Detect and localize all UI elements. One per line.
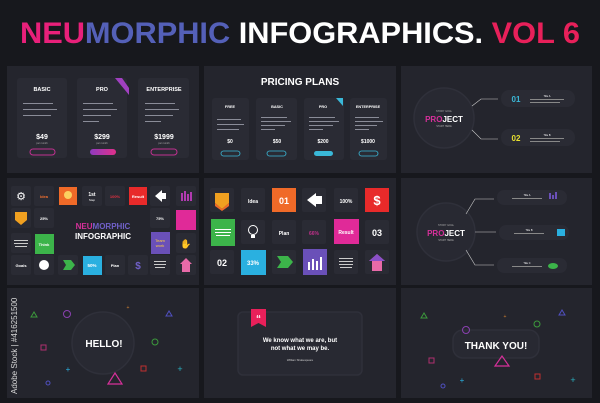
- pill A: [497, 190, 567, 205]
- pill B: [499, 225, 569, 240]
- panel: project two titles: START HERE: [436, 125, 452, 128]
- panel: neumorphic infographic icons: 100%: [110, 194, 121, 199]
- panel: hello: HELLO!: [85, 339, 123, 350]
- panel: project three titles: PROJECT: [427, 229, 465, 238]
- panel: large icon grid: 01: [279, 196, 289, 206]
- pill C: [497, 258, 567, 273]
- icon: quote bookmark: [251, 309, 266, 327]
- panel: neumorphic infographic icons: $: [135, 261, 141, 272]
- panel: neumorphic infographic icons: work: [156, 243, 164, 248]
- pill 01: [501, 90, 575, 107]
- panel: large icon grid: 66%: [309, 231, 320, 237]
- panel: neumorphic infographic icons: ✋: [180, 238, 192, 249]
- panel: neumorphic infographic icons: Goals: [15, 263, 27, 268]
- card: enterprise: [138, 78, 189, 158]
- panel: neumorphic infographic icons: 25%: [40, 216, 48, 221]
- panel: hello: +: [127, 305, 130, 311]
- card: enterprise: per month: [158, 142, 170, 145]
- panel: neumorphic infographic icons: [7, 178, 199, 285]
- title: NEUMORPHIC INFOGRAPHICS. VOL 6: [20, 17, 580, 50]
- panel: large icon grid: Plan: [279, 231, 289, 237]
- panel: pricing plans: PRICING PLANS: [261, 77, 339, 88]
- panel: hello: +: [177, 364, 183, 374]
- card: basic: $49: [36, 134, 48, 141]
- panel: thank you: +: [570, 375, 576, 385]
- card: basic: BASIC: [33, 87, 51, 93]
- panel: thank you: [401, 288, 592, 398]
- card: enterprise: $1999: [154, 134, 174, 141]
- pill 01: Title A: [544, 95, 551, 98]
- card: basic: per month: [36, 142, 48, 145]
- pill 02: 02: [512, 134, 521, 143]
- panel: pricing plans: $50: [273, 139, 281, 145]
- panel: pricing plans: $200: [317, 139, 329, 145]
- panel: pricing plans: $1000: [361, 139, 375, 145]
- pill 02: Title B: [544, 134, 551, 137]
- panel: large icon grid: Result: [338, 230, 354, 236]
- panel: large icon grid: [204, 178, 396, 285]
- card: basic: [17, 78, 67, 158]
- panel: project three titles: [401, 178, 592, 285]
- panel: neumorphic infographic icons: NEUMORPHIC: [76, 222, 131, 231]
- pill 02: [501, 129, 575, 146]
- panel: thank you: THANK YOU!: [465, 341, 527, 352]
- panel: quote: William Shakespeare: [287, 358, 314, 362]
- panel: neumorphic infographic icons: Step: [89, 198, 95, 202]
- pill B: Title B: [526, 229, 533, 232]
- panel: large icon grid: 100%: [340, 199, 353, 205]
- panel: large icon grid: 03: [372, 228, 382, 238]
- pill C: Title C: [523, 262, 531, 265]
- panel: neumorphic infographic icons: Plan: [111, 263, 120, 268]
- panel: project three titles: START HERE: [438, 239, 454, 242]
- panel: neumorphic infographic icons: Think: [39, 242, 50, 247]
- panel: quote: We know what we are, but: [263, 338, 337, 344]
- panel: neumorphic infographic icons: Idea: [40, 194, 49, 199]
- card: pro: per month: [96, 142, 108, 145]
- panel: pricing plans: BASIC: [271, 105, 283, 109]
- panel: project three titles: STORY GOAL: [438, 224, 455, 227]
- panel: project two titles: STORY GOAL: [436, 110, 453, 113]
- panel: large icon grid: 33%: [247, 261, 260, 267]
- panel: neumorphic infographic icons: Result: [132, 194, 145, 199]
- panel: large icon grid: 02: [217, 258, 227, 268]
- card: pro: [77, 78, 129, 158]
- panel: pricing plans: FREE: [225, 105, 236, 109]
- panel: pricing plans: ENTERPRISE: [356, 105, 381, 109]
- pill 01: 01: [512, 95, 521, 104]
- panel: pricing plans: PRO: [319, 105, 327, 109]
- panel: neumorphic infographic icons: ⚙: [16, 191, 26, 203]
- panel: neumorphic infographic icons: 75%: [156, 216, 164, 221]
- card: pro: $299: [94, 134, 110, 141]
- panel: neumorphic infographic icons: 1st: [88, 192, 96, 198]
- panel: neumorphic infographic icons: Team: [155, 238, 166, 243]
- icon: quote bookmark: “: [256, 314, 261, 325]
- panel: quote: [204, 288, 396, 398]
- panel: project two titles: PROJECT: [425, 115, 463, 124]
- panel: project two titles: [401, 66, 592, 173]
- panel: pricing plans: [204, 66, 396, 173]
- panel: pricing three cards: [7, 66, 199, 173]
- panel: hello: +: [66, 365, 71, 374]
- panel: quote: not what we may be.: [271, 346, 329, 352]
- panel: pricing plans: $0: [227, 139, 233, 145]
- panel: neumorphic infographic icons: INFOGRAPHIC: [75, 232, 131, 241]
- panel: large icon grid: Idea: [248, 199, 258, 205]
- pill A: Title A: [524, 194, 531, 197]
- panel: neumorphic infographic icons: 50%: [87, 263, 97, 268]
- card: enterprise: ENTERPRISE: [146, 87, 182, 93]
- panel: thank you: +: [504, 314, 507, 320]
- watermark text: Adobe Stock | #416251500: [10, 297, 19, 394]
- card: pro: PRO: [96, 87, 109, 93]
- panel: large icon grid: $: [373, 193, 381, 208]
- panel: hello: [7, 288, 199, 398]
- panel: thank you: +: [460, 376, 465, 385]
